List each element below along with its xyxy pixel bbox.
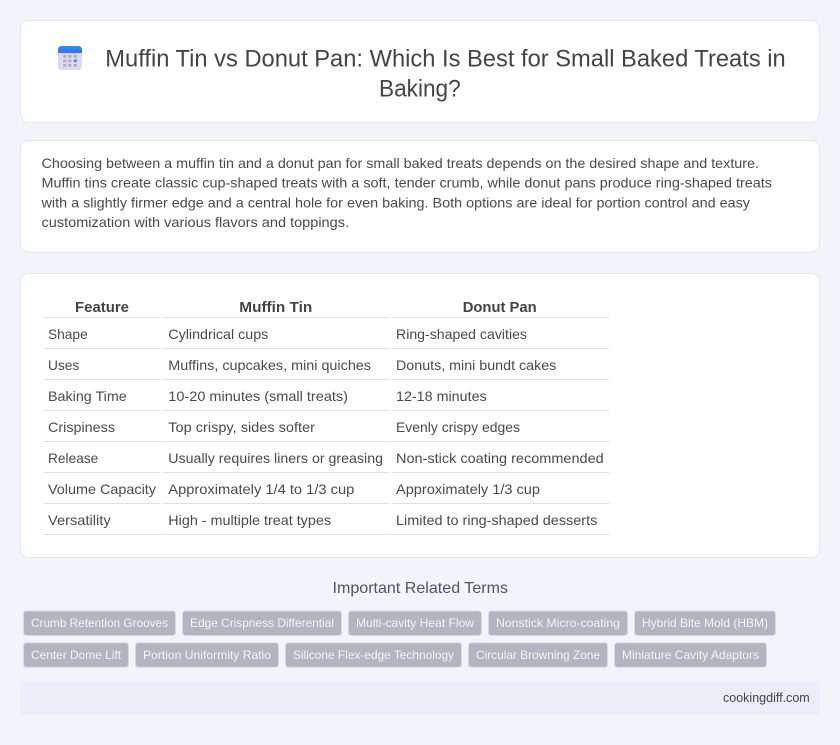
row: volume capacity xyxy=(43,481,609,504)
tag: Multi-cavity Heat Flow xyxy=(356,616,474,630)
row: uses xyxy=(43,357,609,380)
row: shape xyxy=(43,326,609,349)
tag xyxy=(182,611,342,636)
tag: Silicone Flex-edge Technology xyxy=(293,648,454,662)
row: baking time: 10-20 minutes (small treats) xyxy=(168,388,348,404)
tag: Miniature Cavity Adaptors xyxy=(622,648,759,662)
row: versatility xyxy=(43,512,609,535)
intro text: Choosing between a muffin tin and a donut pan for small baked treats depends on the desired shape and texture. xyxy=(42,155,759,171)
tag: Portion Uniformity Ratio xyxy=(143,648,271,662)
footer source: cookingdiff.com xyxy=(723,690,810,705)
table header row: Donut Pan xyxy=(463,299,537,316)
row: crispiness: Evenly crispy edges xyxy=(396,419,520,435)
footer bar xyxy=(20,681,820,714)
row: shape: Cylindrical cups xyxy=(168,326,268,342)
row: versatility: Versatility xyxy=(48,512,111,528)
title xyxy=(105,46,786,102)
intro text: with a slightly firmer edge and a central hole for even baking. Both options are ideal for portion control and easy xyxy=(40,194,750,210)
tag xyxy=(24,643,128,667)
panel: comparison table xyxy=(20,274,820,558)
row: versatility: High - multiple treat types xyxy=(168,512,331,528)
row: volume capacity: Approximately 1/3 cup xyxy=(396,481,540,497)
row: crispiness: Top crispy, sides softer xyxy=(168,419,315,435)
panel: title header xyxy=(20,20,820,122)
row: uses: Muffins, cupcakes, mini quiches xyxy=(168,357,371,373)
row: baking time xyxy=(43,388,609,411)
row: release: Non-stick coating recommended xyxy=(396,450,604,466)
panel: intro paragraph xyxy=(20,140,820,252)
tag xyxy=(614,643,766,667)
tag xyxy=(488,611,628,636)
intro text: Muffin tins create classic cup-shaped treats with a soft, tender crumb, while donut pans produce ring-shaped treats xyxy=(42,175,772,191)
related term tags xyxy=(24,611,776,667)
table header row: Muffin Tin xyxy=(239,299,312,316)
title: Muffin Tin vs Donut Pan: Which Is Best for Small Baked Treats in xyxy=(105,46,786,73)
row: release xyxy=(43,450,609,473)
row: shape: Shape xyxy=(48,326,88,342)
icon: calendar xyxy=(58,46,82,70)
row: volume capacity: Volume Capacity xyxy=(48,481,156,497)
tag xyxy=(24,611,176,636)
tag: Nonstick Micro-coating xyxy=(496,616,620,630)
tag: Center Dome Lift xyxy=(31,648,122,662)
row: release: Usually requires liners or greasing xyxy=(168,450,383,466)
row: versatility: Limited to ring-shaped desserts xyxy=(396,512,597,528)
title: Baking? xyxy=(379,76,461,102)
row: crispiness: Crispiness xyxy=(48,419,115,435)
intro text: customization with various flavors and toppings. xyxy=(42,214,349,230)
row: shape: Ring-shaped cavities xyxy=(396,326,527,342)
tag: Edge Crispness Differential xyxy=(190,616,334,630)
tag: Circular Browning Zone xyxy=(476,648,600,662)
row: crispiness xyxy=(43,419,609,442)
table header row xyxy=(43,299,609,318)
tag: Hybrid Bite Mold (HBM) xyxy=(642,616,768,630)
intro text xyxy=(40,155,772,230)
tag xyxy=(634,611,776,636)
row: uses: Donuts, mini bundt cakes xyxy=(396,357,556,373)
tag xyxy=(286,643,462,667)
heading: important related terms: Important Related Terms xyxy=(332,580,508,597)
row: uses: Uses xyxy=(48,357,79,373)
tag xyxy=(136,643,278,667)
tag xyxy=(348,611,482,636)
row: baking time: 12-18 minutes xyxy=(396,388,487,404)
row: release: Release xyxy=(48,450,98,466)
tag: Crumb Retention Grooves xyxy=(31,616,168,630)
row: baking time: Baking Time xyxy=(48,388,127,404)
table header row: Feature xyxy=(75,299,129,316)
tag xyxy=(468,643,608,667)
row: volume capacity: Approximately 1/4 to 1/3 cup xyxy=(168,481,355,497)
